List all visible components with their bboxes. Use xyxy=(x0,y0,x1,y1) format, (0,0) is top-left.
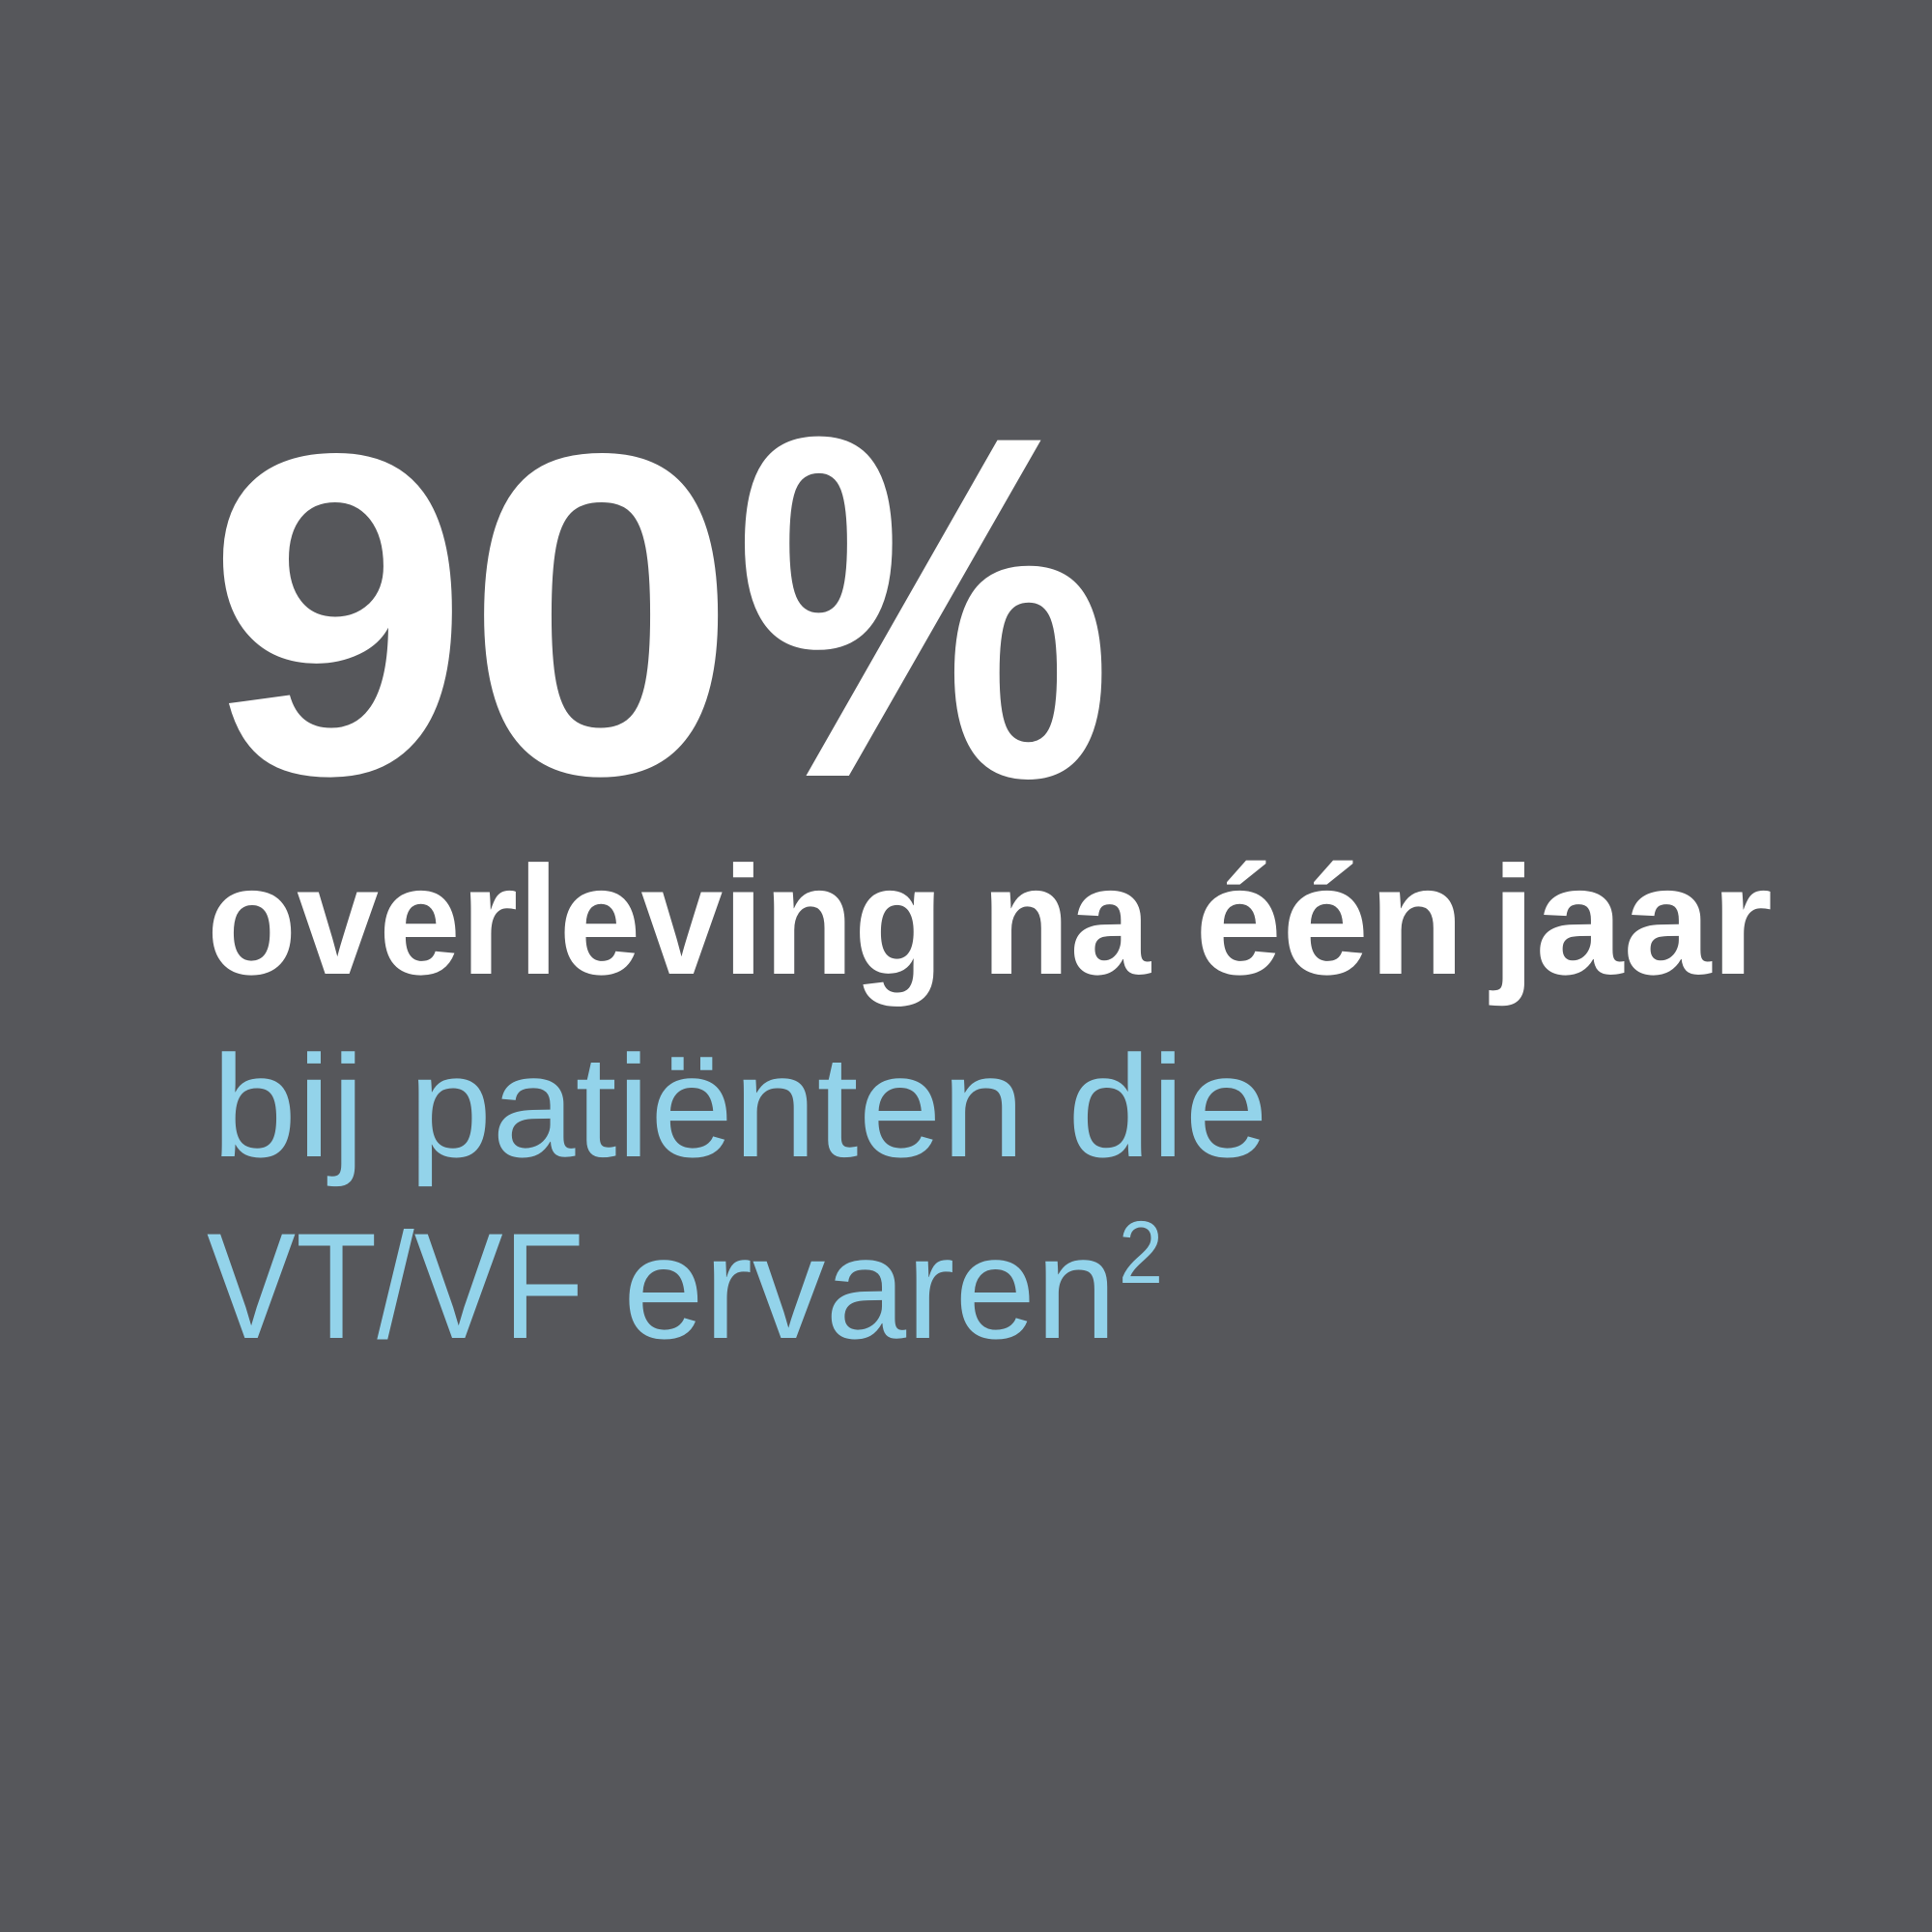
subtext line 2: VT/VF ervaren: VT/VF xyxy=(207,1203,584,1371)
heading: overleving na één jaar: één xyxy=(1195,834,1464,1007)
heading: overleving na één jaar: overleving xyxy=(207,834,944,1007)
big statistic: 90%: 9 xyxy=(207,359,469,870)
subtext line 1: bij patiënten die: bij xyxy=(212,1025,365,1187)
big statistic: 90%: 0 xyxy=(465,359,738,870)
heading: overleving na één jaar: jaar xyxy=(1489,834,1773,1007)
subtext line 1: bij patiënten die xyxy=(212,1025,1268,1187)
subtext line 1: bij patiënten die: patiënten xyxy=(409,1025,1025,1187)
subtext line 2: VT/VF ervaren: ervaren xyxy=(623,1207,1117,1369)
heading: overleving na één jaar: na xyxy=(981,834,1151,1007)
heading: overleving na één jaar xyxy=(207,834,1773,1007)
big statistic: 90% xyxy=(207,335,1113,880)
subtext line 2: VT/VF ervaren: 2 xyxy=(1119,1204,1163,1302)
big statistic: 90%: % xyxy=(734,335,1113,880)
subtext line 2: VT/VF ervaren xyxy=(207,1203,1163,1371)
subtext line 1: bij patiënten die: die xyxy=(1067,1025,1268,1187)
